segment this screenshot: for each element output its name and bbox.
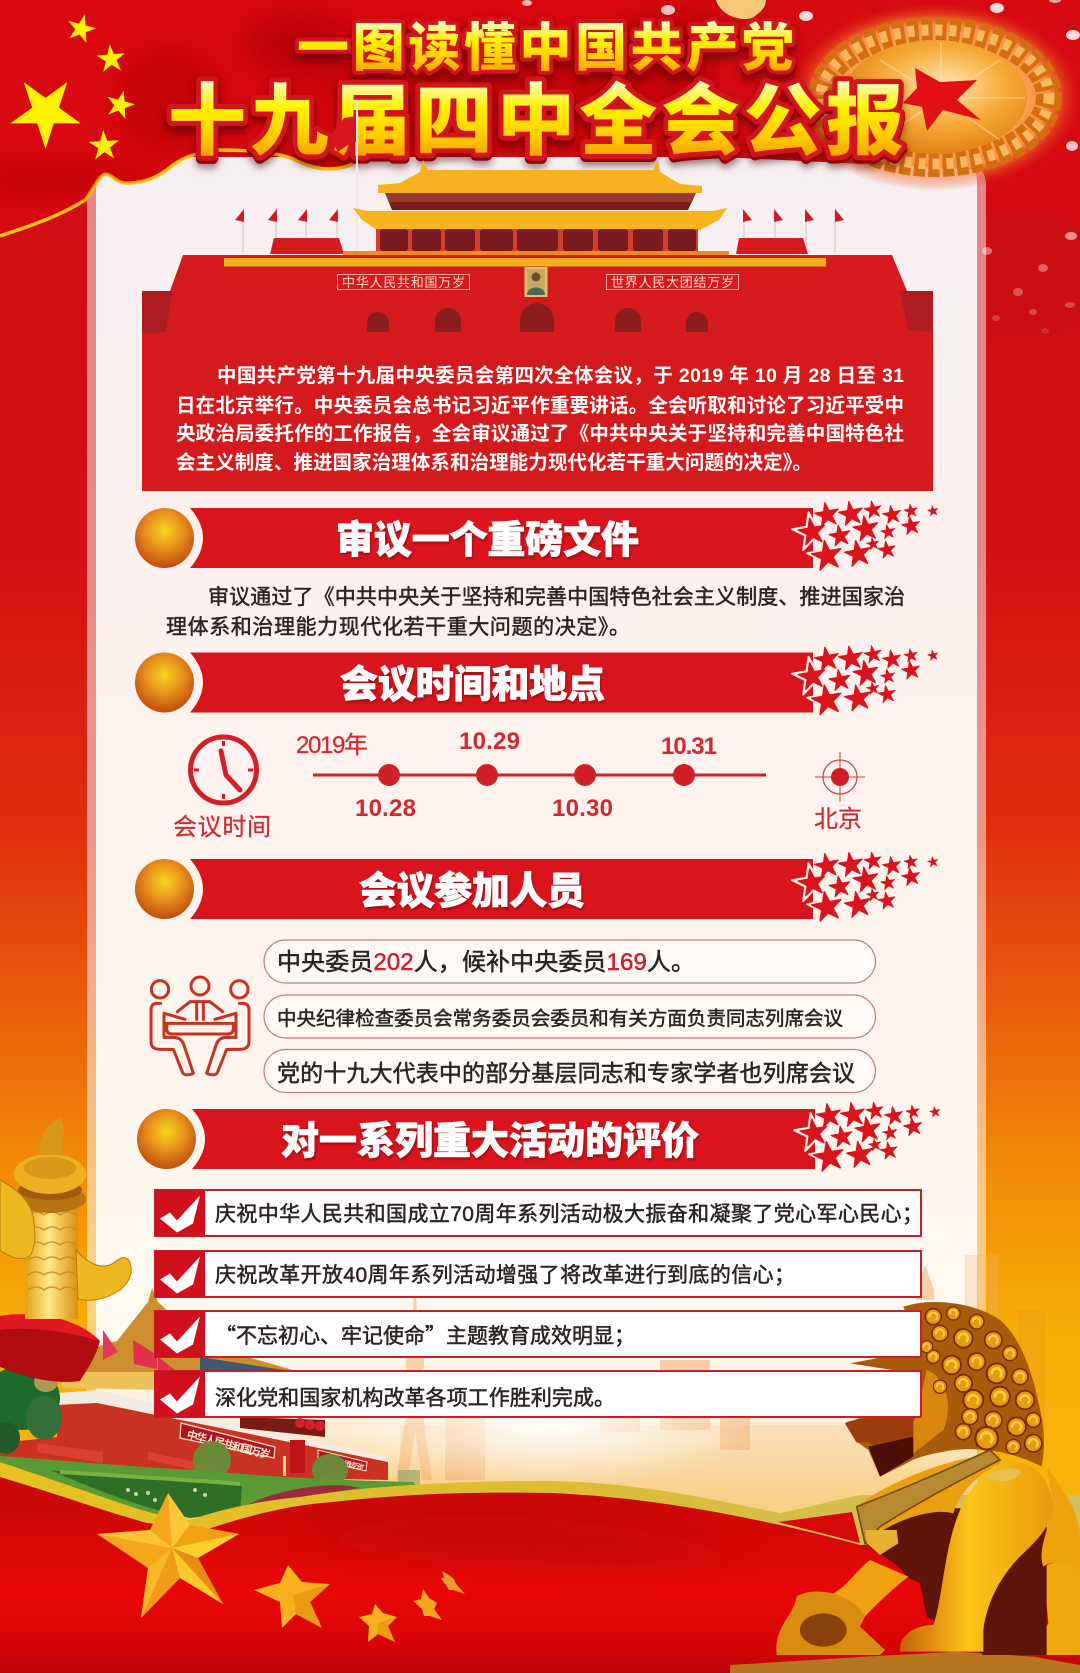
huabiao column <box>0 1118 131 1382</box>
section header: document <box>135 500 939 575</box>
banner: left slogan: 中华人民共和国万岁 <box>342 275 465 290</box>
intro paragraph: 央政治局委托作的工作报告，全会审议通过了《中共中央关于坚持和完善中国特色社 <box>176 422 904 445</box>
check row 4: 深化党和国家机构改革各项工作胜利完成。 <box>215 1387 615 1410</box>
scene: Tiananmen photo <box>0 1288 420 1518</box>
star: large <box>97 1493 239 1618</box>
centre light glow <box>340 1363 760 1487</box>
check row 2 <box>155 1251 921 1297</box>
check row 1: 庆祝中华人民共和国成立70周年系列活动极大振奋和凝聚了党心军心民心； <box>215 1203 923 1226</box>
dark fold in red wave <box>300 1515 760 1575</box>
banner: right slogan: 世界人民大团结万岁 <box>611 275 734 290</box>
star: small 2 <box>413 1589 442 1620</box>
Tiananmen gate illustration <box>142 160 933 491</box>
right top red area <box>720 0 1080 225</box>
side pavilions <box>270 238 344 254</box>
pill: members count: 中央委员202人，候补中央委员169人。 <box>277 949 695 976</box>
small red flag over title <box>330 116 356 152</box>
bokeh dots top <box>522 0 1080 151</box>
section header: evaluation <box>137 1101 941 1176</box>
check row 3: “不忘初心、牢记使命”主题教育成效明显； <box>215 1320 635 1350</box>
pill: discipline commission <box>264 995 876 1038</box>
body text: document: 审议通过了《中共中央关于坚持和完善中国特色社会主义制度、推进国家治 <box>208 586 905 609</box>
stars: gold star group <box>97 1493 465 1642</box>
section header: evaluation: 对一系列重大活动的评价 <box>281 1121 699 1163</box>
red lower wave <box>0 1477 1080 1673</box>
side flags <box>235 209 844 253</box>
check row 3 <box>155 1311 921 1357</box>
lower roof <box>353 208 727 230</box>
section header: attendees: 会议参加人员 <box>359 870 585 913</box>
red sliver on ribbon <box>778 1512 860 1543</box>
pill: delegates: 党的十九大代表中的部分基层同志和专家学者也列席会议 <box>277 1060 855 1086</box>
timeline: 2019年 <box>296 732 368 759</box>
label: meeting time: 会议时间 <box>173 814 271 841</box>
sign: right banner <box>318 1450 367 1472</box>
icon: clock <box>190 737 256 803</box>
eaves <box>385 193 696 210</box>
intro paragraph <box>176 364 904 474</box>
timeline: 10.29 <box>459 728 520 755</box>
timeline: 10.30 <box>552 795 613 822</box>
pill: discipline commission: 中央纪律检查委员会常务委员会委员和有关方面负责同志列席会议 <box>277 1008 843 1030</box>
sign: right banner: 世界人民大团结万岁 <box>321 1453 365 1472</box>
title line 1: 一图读懂中国共产党 <box>297 20 797 78</box>
intro paragraph: 中国共产党第十九届中央委员会第四次全体会议，于 2019 年 10 月 28 日至 31 <box>217 364 904 387</box>
bokeh and wave: right side decoration <box>982 181 1080 340</box>
star: medium <box>254 1565 330 1628</box>
icon: location target <box>815 752 865 802</box>
body text: document: 理体系和治理能力现代化若干重大问题的决定》。 <box>166 616 630 639</box>
section header: time and place <box>135 644 939 720</box>
title line 2: 十九届四中全会公报 <box>168 77 908 165</box>
gold beam <box>224 258 826 266</box>
gate wall <box>142 255 933 491</box>
stone lion <box>730 1302 1080 1673</box>
intro paragraph: 会主义制度、推进国家治理体系和治理能力现代化若干重大问题的决定》。 <box>176 451 812 474</box>
ornament: gold swirl at top <box>716 0 766 19</box>
timeline <box>296 728 766 822</box>
check row 2: 庆祝改革开放40周年系列活动增强了将改革进行到底的信心； <box>215 1264 795 1287</box>
label: Beijing: 北京 <box>814 806 862 833</box>
gold ribbon <box>0 1462 1080 1560</box>
check row 1 <box>155 1190 923 1236</box>
portrait <box>524 267 548 297</box>
bottom peach fill <box>400 1425 880 1550</box>
star: small 3 <box>441 1571 465 1594</box>
sign: left banner: 中华人民共和国万岁 <box>185 1427 272 1462</box>
arches <box>367 303 708 332</box>
body text: document <box>166 586 905 639</box>
section header: time and place: 会议时间和地点 <box>340 664 605 706</box>
wall shadow left <box>142 291 172 334</box>
timeline: 10.31 <box>661 733 717 760</box>
timeline: 10.28 <box>355 795 416 822</box>
emblem: national emblem ring <box>789 3 1080 191</box>
star: small 1 <box>359 1604 397 1642</box>
flag stars <box>10 11 138 160</box>
flag banner top <box>0 0 716 238</box>
pill: members count <box>264 940 876 983</box>
check row 4 <box>155 1371 921 1417</box>
flagpole <box>356 100 358 252</box>
intro paragraph: 日在北京举行。中央委员会总书记习近平作重要讲话。全会听取和讨论了习近平受中 <box>176 394 904 417</box>
icon: people at table <box>151 977 249 1075</box>
section header: document: 审议一个重磅文件 <box>336 519 639 562</box>
section header: attendees <box>135 851 939 926</box>
icon: red star <box>903 68 981 131</box>
panel: white content card <box>87 157 986 1557</box>
skyline silhouette <box>396 1255 1045 1480</box>
wall shadow right <box>900 291 933 332</box>
upper roof <box>378 160 702 193</box>
columns <box>376 229 698 252</box>
pill: delegates <box>264 1050 876 1092</box>
